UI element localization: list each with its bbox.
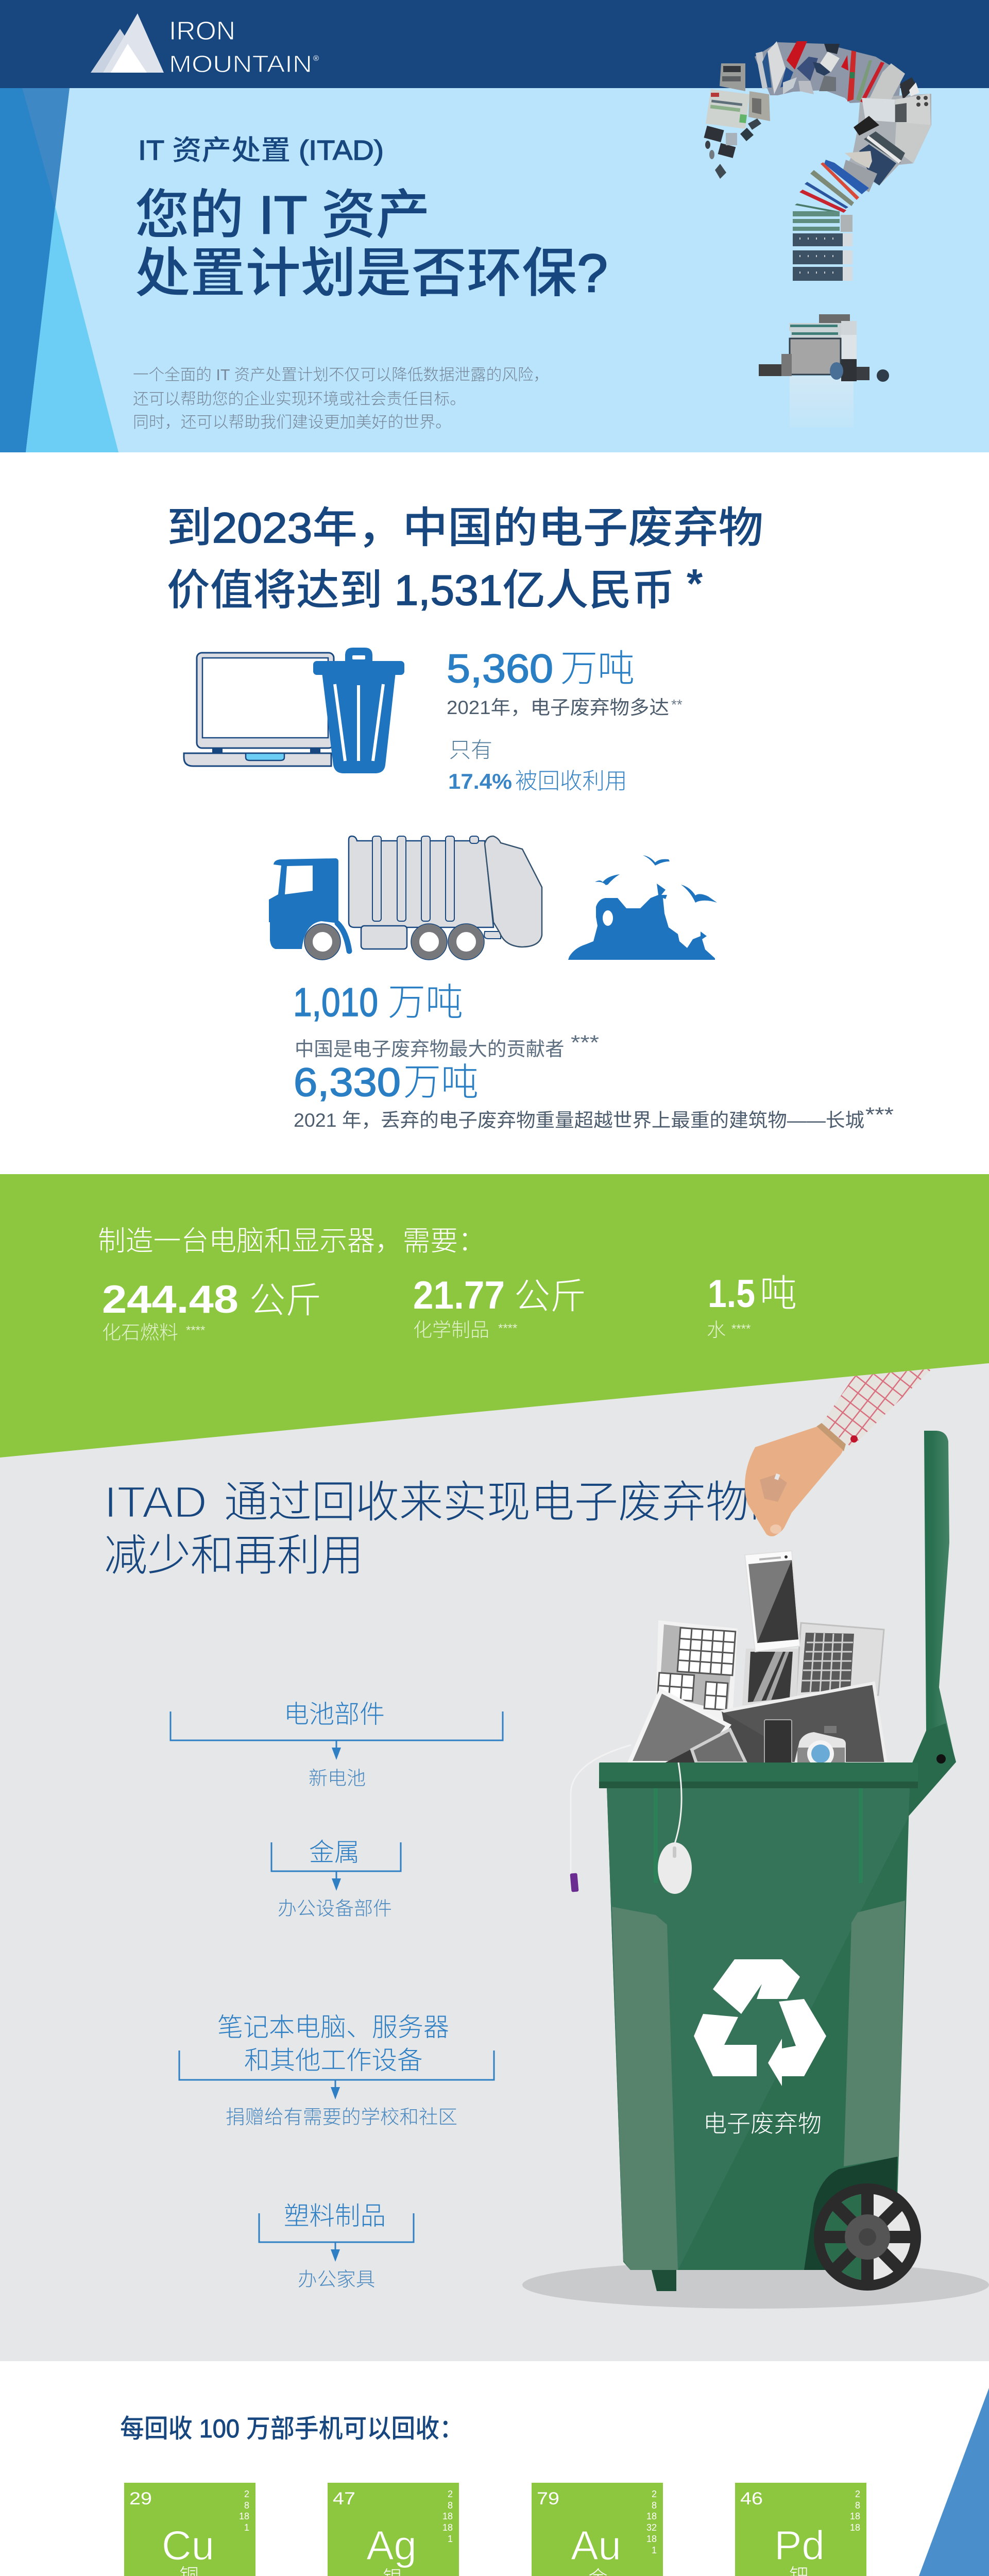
stat: 10.1 million tonnes from China: 万吨: [388, 981, 463, 1023]
tile: silver: 47: [333, 2489, 355, 2509]
diagram: recycled material flows: [170, 1701, 503, 2290]
lid arm lower section: [908, 1723, 956, 1817]
ground shadow: [522, 2261, 989, 2309]
stat: chemicals: 21.77: [413, 1274, 505, 1317]
tile: palladium: [735, 2483, 866, 2576]
tile: copper: 29: [129, 2489, 152, 2509]
stat: 53.6 million tonnes: 5,360: [447, 646, 553, 691]
stat: 63.3 million tonnes vs Great Wall: 6,330: [294, 1059, 401, 1105]
flow: plastics: 塑料制品: [284, 2202, 386, 2230]
logo: Iron Mountain: IRON: [169, 16, 235, 45]
illustration: question mark made of IT hardware: [704, 41, 931, 281]
bin lid rim: [599, 1762, 918, 1788]
bin ridges: [656, 1788, 861, 1883]
tile: copper: 2: [244, 2489, 249, 2499]
tile: palladium: 2: [855, 2489, 860, 2499]
tile: gold: 18: [646, 2511, 657, 2521]
heading: China e-waste value by 2023: 价值将达到 1,531亿人民币: [167, 566, 675, 614]
flow: plastics: 办公家具: [298, 2268, 375, 2290]
heading: ITAD reduces and reuses through recycling: [104, 1478, 793, 1580]
tile: silver: Ag: [366, 2522, 417, 2568]
tile: copper: 1: [244, 2522, 249, 2533]
heading: making a computer requires: 制造一台电脑和显示器，需要：: [98, 1226, 486, 1257]
tile: gold: 18: [646, 2534, 657, 2544]
panel: recycling section background: [0, 1360, 989, 2361]
tile: palladium: 8: [855, 2500, 860, 2511]
mouse cable: [675, 1762, 681, 1843]
panel: metals recovered from phones: [0, 2361, 989, 2576]
flow: metals: [271, 1839, 401, 1919]
heading: every million phones: 每回收 100 万部手机可以回收：: [120, 2414, 464, 2443]
panel: e-waste value stats: [167, 504, 894, 1131]
second mouse cable with plug: [570, 1745, 631, 1892]
stat: fossil fuel: [102, 1278, 321, 1343]
heading: China e-waste value by 2023: 到2023年，中国的电子废弃物: [167, 504, 763, 552]
header navy band: [0, 0, 989, 88]
flow: batteries: 新电池: [309, 1768, 366, 1789]
stat: water: ****: [731, 1322, 751, 1336]
icon: recycling symbol: [694, 1959, 826, 2086]
stat: water: 吨: [760, 1273, 797, 1314]
illustration: IT hardware pile with reflection: [759, 314, 889, 428]
hero description: [133, 366, 549, 431]
tile: palladium: 18: [850, 2511, 860, 2521]
tile: gold: 1: [652, 2545, 657, 2555]
tile: palladium: 46: [740, 2489, 763, 2509]
device: smartphone: [745, 1551, 800, 1652]
hero title: 处置计划是否环保 ?: [135, 244, 608, 303]
tile: gold: 79: [537, 2489, 559, 2509]
icon: garbage truck: [269, 836, 542, 960]
flow: plastics: [259, 2202, 414, 2290]
fingernail: [770, 1524, 781, 1534]
tile: silver: 18: [442, 2522, 453, 2533]
shirt sleeve: [822, 1369, 932, 1447]
flow: laptops and servers: 和其他工作设备: [244, 2046, 422, 2075]
hero lighter shard: [22, 88, 70, 206]
small part held in fingers: [774, 1473, 780, 1480]
stat: only 17.4% recycled: 被回收利用: [515, 769, 627, 794]
flow: laptops and servers: 捐赠给有需要的学校和社区: [226, 2106, 457, 2128]
tile: copper: [124, 2483, 255, 2576]
stat: 53.6 million tonnes: **: [671, 697, 683, 713]
hero left blue shard: [0, 88, 70, 452]
hero title: 您的 IT 资产: [135, 185, 430, 245]
stat: chemicals: 化学制品: [413, 1319, 489, 1341]
hero description: 还可以帮助您的企业实现环境或社会责任目标。: [133, 390, 466, 408]
illustration: green e-waste bin: [522, 1431, 989, 2309]
tile: palladium: 18: [850, 2522, 860, 2533]
tile: copper: 8: [244, 2500, 249, 2511]
icon: laptop: [184, 653, 334, 766]
heading: ITAD reduces and reuses through recycling: 减少和再利用: [104, 1531, 364, 1580]
panel: resources to make a computer: [0, 1174, 989, 1458]
flow: laptops and servers: [179, 2013, 494, 2128]
tile: gold: 8: [652, 2500, 657, 2511]
stat: fossil fuel: 公斤: [249, 1280, 321, 1320]
device: camera: [794, 1726, 846, 1767]
shirt cuff band: [816, 1423, 846, 1451]
flow: metals: 办公设备部件: [278, 1898, 392, 1919]
heading: China e-waste value by 2023: [167, 504, 763, 614]
stat: water: 1.5: [708, 1272, 755, 1316]
hero title: [135, 185, 608, 303]
bin wheel well: [804, 2157, 897, 2270]
flow: laptops and servers: 笔记本电脑、服务器: [217, 2013, 449, 2042]
green angled background: [0, 1174, 989, 1458]
stat: fossil fuel: ****: [186, 1324, 205, 1337]
tile: silver: 2: [448, 2489, 453, 2499]
flow: batteries: 电池部件: [284, 1701, 385, 1728]
hand: [745, 1427, 843, 1536]
mouse: [658, 1842, 692, 1894]
illustration: hand dropping a device: [745, 1369, 932, 1536]
heading: ITAD reduces and reuses through recycling: ITAD: [104, 1478, 207, 1527]
stat: only 17.4% recycled: [448, 738, 627, 794]
finger shadow: [760, 1475, 787, 1502]
stat: 10.1 million tonnes from China: ***: [571, 1031, 599, 1054]
cuff button: [850, 1435, 858, 1443]
stat: 53.6 million tonnes: [447, 646, 683, 718]
wheel: [814, 2183, 921, 2291]
hero sky shard: [26, 206, 118, 452]
hero description: 一个全面的 IT 资产处置计划不仅可以降低数据泄露的风险，: [133, 366, 549, 384]
tile: copper: 18: [239, 2511, 249, 2521]
stat: only 17.4% recycled: 只有: [449, 738, 492, 762]
stat: 10.1 million tonnes from China: [293, 979, 599, 1060]
stat: 10.1 million tonnes from China: 中国是电子废弃物最大的贡献者: [295, 1038, 564, 1060]
bin foot: [652, 2270, 676, 2291]
tile: gold: 32: [646, 2522, 657, 2533]
logo: Iron Mountain: MOUNTAIN: [169, 50, 312, 77]
stat: 63.3 million tonnes vs Great Wall: 万吨: [403, 1061, 479, 1103]
device: keyboard left: [654, 1620, 738, 1762]
device: large tablet: [722, 1683, 886, 1764]
tile: gold: Au: [571, 2522, 621, 2568]
stat: water: [707, 1272, 797, 1341]
device: small black phone: [764, 1720, 792, 1764]
stat: chemicals: ****: [498, 1321, 517, 1335]
bin label: 电子废弃物: [703, 2110, 822, 2137]
stat: 10.1 million tonnes from China: 1,010: [293, 979, 378, 1025]
stat: water: 水: [707, 1319, 726, 1341]
stat: chemicals: 公斤: [514, 1276, 586, 1316]
tile: gold: 2: [652, 2489, 657, 2499]
hero light blue background: [0, 88, 989, 452]
tile: palladium: Pd: [774, 2522, 825, 2568]
tile: silver: 8: [448, 2500, 453, 2511]
stat: 53.6 million tonnes: 2021年，电子废弃物多达: [447, 697, 669, 718]
bin upper lighter shade: [607, 1787, 910, 2270]
flow: metals: 金属: [309, 1839, 360, 1867]
icon: trash can: [313, 648, 404, 773]
stat: fossil fuel: 244.48: [102, 1278, 238, 1321]
device: small gray phone: [692, 1730, 746, 1763]
tile: silver: [328, 2483, 459, 2576]
logo: Iron Mountain: [91, 13, 319, 77]
logo: Iron Mountain: ®: [313, 54, 319, 63]
tile: silver: 1: [448, 2534, 453, 2544]
hero description: 同时，还可以帮助我们建设更加美好的世界。: [133, 413, 451, 431]
flow: batteries: [170, 1701, 503, 1789]
icon: garbage pile with birds: [568, 855, 717, 960]
stat: 63.3 million tonnes vs Great Wall: [294, 1059, 894, 1131]
stat: 53.6 million tonnes: 万吨: [560, 648, 635, 689]
heading: ITAD reduces and reuses through recycling: 通过回收来实现电子废弃物的: [224, 1478, 793, 1527]
stat: 63.3 million tonnes vs Great Wall: ***: [865, 1104, 894, 1126]
stat: chemicals: [413, 1274, 586, 1341]
tile: gold: [532, 2483, 663, 2576]
panel: hero: [0, 0, 989, 452]
device: keyboard right: [795, 1623, 884, 1705]
tile: copper: Cu: [162, 2522, 214, 2568]
tile: silver: 18: [442, 2511, 453, 2521]
lid arm: [908, 1431, 956, 1817]
device: tablet behind phone: [742, 1649, 798, 1705]
stat: fossil fuel: 化石燃料: [102, 1322, 178, 1343]
bin left panel: [612, 1907, 678, 2270]
hinge: [936, 1754, 946, 1764]
eyebrow: IT asset disposition: IT 资产处置 (ITAD): [138, 135, 384, 166]
corner blue shard: [871, 2388, 989, 2576]
stat: 63.3 million tonnes vs Great Wall: 2021 年，丢弃的电子废弃物重量超越世界上最重的建筑物——长城: [294, 1110, 864, 1131]
bin body: [607, 1787, 910, 2270]
heading: China e-waste value by 2023: *: [687, 561, 703, 606]
device: tablet left: [629, 1691, 728, 1763]
white background: [0, 2361, 989, 2576]
stat: only 17.4% recycled: 17.4%: [448, 769, 512, 793]
bin right panel: [844, 1901, 905, 2166]
